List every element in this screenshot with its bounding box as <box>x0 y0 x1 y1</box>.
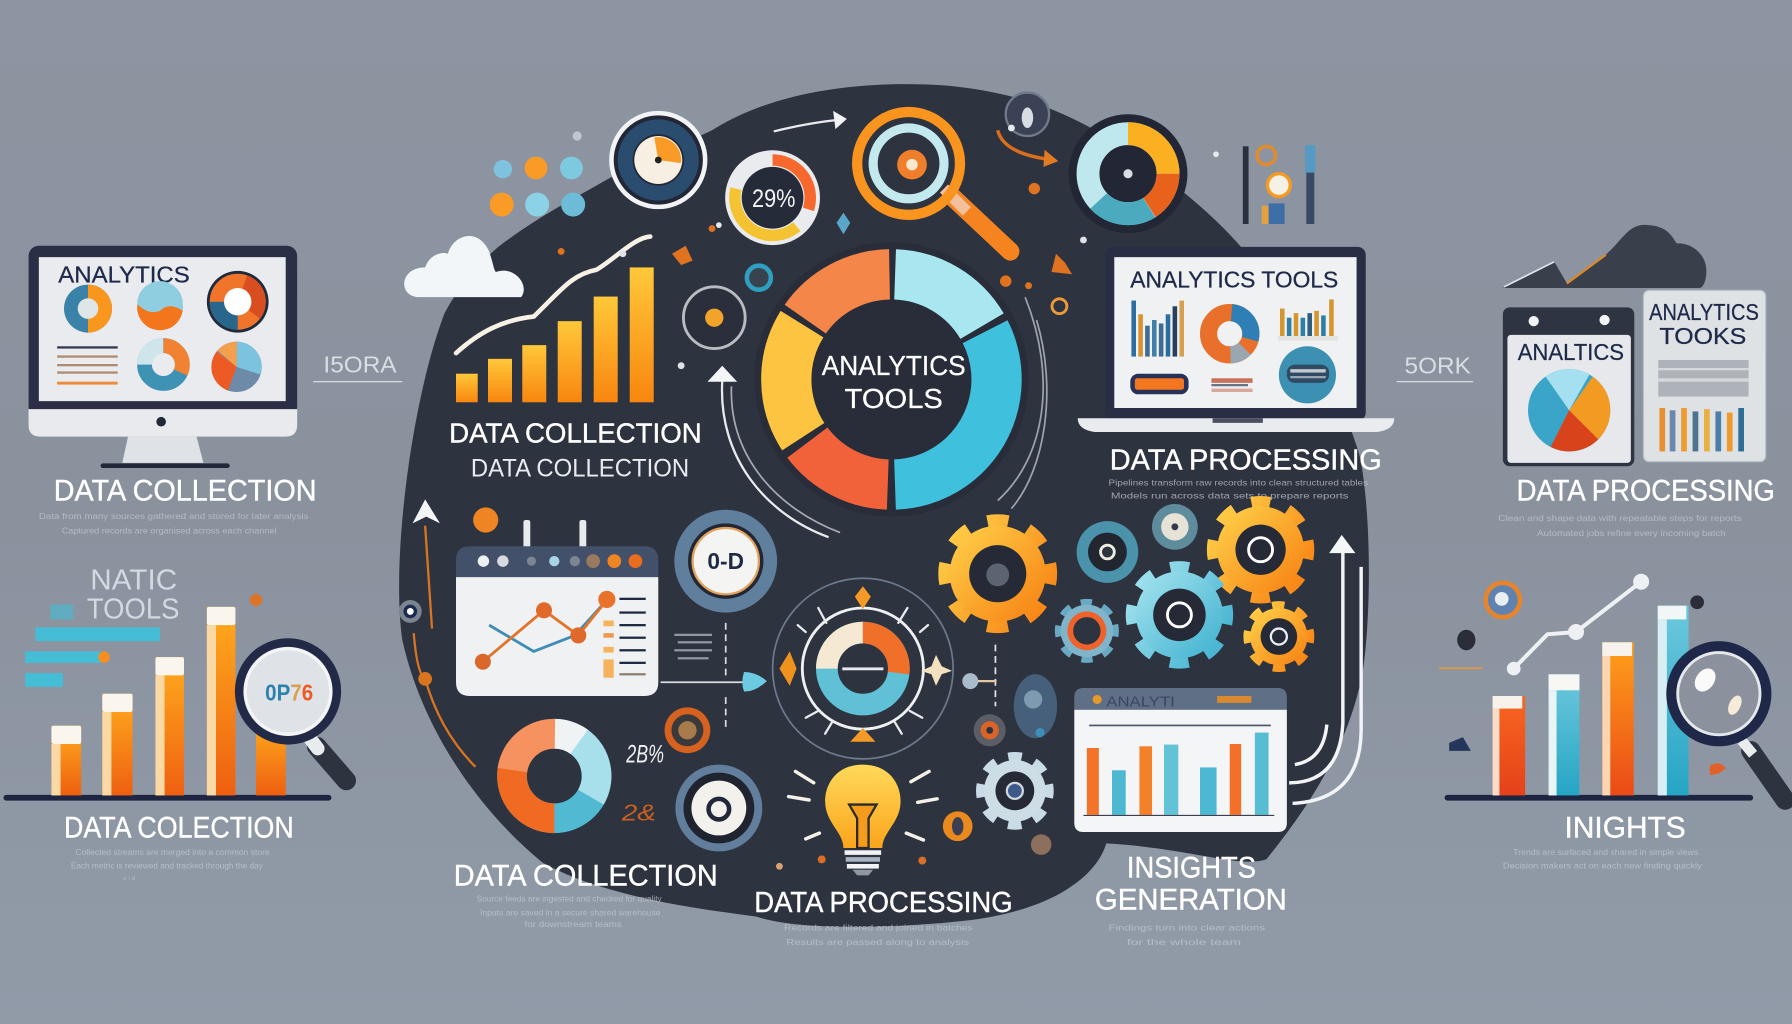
caption: data collection lower left: Collected streams are merged into a common store <box>75 847 270 857</box>
scattered glyph marks <box>558 125 1219 369</box>
tag: I5ORA: I5ORA <box>323 352 397 378</box>
icon: small orange ring badge <box>665 707 710 753</box>
icon: tools cluster <box>1243 145 1315 224</box>
tag: I5ORA <box>313 352 402 382</box>
icon: small dial with orange arrow <box>998 93 1058 167</box>
icon: badge with code <box>674 510 777 613</box>
caption: insights right: Decision makers act on each new finding quickly <box>1503 861 1702 871</box>
card bars <box>1659 408 1744 451</box>
label: insights generation: GENERATION <box>1095 884 1287 917</box>
caption: data processing centre: Pipelines transform raw records into clean structured tables <box>1109 478 1368 488</box>
label: data processing centre: DATA PROCESSING <box>1110 445 1382 477</box>
caption: insights right: Trends are surfaced and shared in simple views <box>1513 847 1698 857</box>
caption: data collection bottom: Source feeds are ingested and checked for quality <box>477 894 662 904</box>
panel: monitor analytics <box>29 246 297 468</box>
arrow: top <box>774 111 847 131</box>
line series <box>475 591 615 670</box>
chart: lower donut <box>497 718 612 834</box>
arrow: arcs right of donut <box>998 297 1047 509</box>
caption: insights generation <box>1109 922 1265 947</box>
icon: small beige dial <box>1152 504 1198 550</box>
chart: rising bars <box>456 237 654 402</box>
panel header text: ANALYTI <box>1106 694 1175 710</box>
laptop circle <box>1279 346 1336 403</box>
horizontal cyan bars <box>25 605 160 687</box>
caption: data collection bottom: for downstream teams <box>525 919 622 929</box>
icon: dark orange oval <box>1457 630 1475 650</box>
caption: data collection left: Captured records are organised across each channel <box>62 526 277 536</box>
label: data collection left: DATA COLLECTION <box>54 475 317 508</box>
chart: process dial <box>773 578 953 759</box>
label: data collection centre two: DATA COLLECTION <box>471 455 689 483</box>
card title: ANALYTICS <box>1649 299 1759 325</box>
caption: data processing bottom <box>784 922 973 947</box>
icon: teal ring <box>1077 521 1138 583</box>
icon: orange magnifier <box>857 112 1010 251</box>
icon: colour dots <box>490 157 585 217</box>
caption: data processing right <box>1498 513 1742 538</box>
label: data collection lower left: DATA COLECTION <box>64 812 294 845</box>
icon: small swirl dial <box>683 287 745 349</box>
caption: data collection bottom: Inputs are saved in a secure shared warehouse <box>480 907 661 917</box>
heading: natic tools: NATIC <box>90 565 177 597</box>
caption: data processing bottom: Results are passed along to analysis <box>786 937 969 947</box>
label: insights right: INIGHTS <box>1565 812 1686 845</box>
label: insights generation: INSIGHTS <box>1127 852 1256 885</box>
laptop donut <box>1200 304 1260 364</box>
caption: data collection bottom <box>477 894 662 929</box>
donut title: TOOLS <box>845 383 943 414</box>
icon: small orange ring <box>1052 299 1067 314</box>
header dots <box>478 554 642 568</box>
laptop bar group one <box>1131 301 1184 357</box>
laptop pill <box>1130 374 1189 394</box>
laptop heading: ANALYTICS TOOLS <box>1130 266 1338 292</box>
icon: blue gear with orange ring <box>1055 599 1119 663</box>
panel: analytics calendar card <box>1503 307 1634 466</box>
icon: small spots <box>776 834 1051 870</box>
icon: blue shield blob <box>1014 674 1057 738</box>
card title <box>1649 299 1759 349</box>
caption: data processing bottom: Records are filtered and joined in batches <box>784 922 973 932</box>
icon: cyan gear <box>1126 561 1233 668</box>
caption: data collection lower left: old <box>123 876 135 882</box>
label: insights generation <box>1095 852 1287 917</box>
arrow: calendar to dial <box>661 623 767 730</box>
caption: data collection left <box>39 511 309 536</box>
icon: dark cloud and peak <box>1503 225 1706 288</box>
heading: natic tools: TOOLS <box>87 593 179 625</box>
panel: calendar line chart <box>456 520 658 696</box>
icon: magnifier left: 0P76 <box>265 680 313 706</box>
arrow: up to central donut <box>707 366 840 537</box>
laptop bar group two <box>1278 299 1338 341</box>
donut title: ANALYTICS <box>822 350 966 381</box>
trend line <box>456 237 650 353</box>
bulb rays <box>789 771 937 840</box>
heading: natic tools <box>87 565 179 625</box>
label: data collection centre one: DATA COLLECTION <box>449 417 702 448</box>
arrows: insight loop <box>1289 535 1361 803</box>
icon: badge with code: 0-D <box>707 548 744 574</box>
small list marks <box>674 634 712 659</box>
caption: data processing centre <box>1109 478 1368 500</box>
trend line <box>1507 574 1649 675</box>
icon: small target <box>974 714 1006 746</box>
arrow: left edge up <box>399 499 475 767</box>
caption: data processing centre: Models run across data sets to prepare reports <box>1111 490 1349 500</box>
caption: data collection lower left <box>71 847 270 882</box>
icon: orange blob <box>473 507 498 533</box>
panel: laptop analytics tools <box>1078 247 1394 432</box>
icon: light bulb <box>789 765 937 875</box>
donut four <box>145 346 182 383</box>
icon: target dial <box>609 111 707 209</box>
panel bars <box>1087 733 1269 815</box>
card title: TOOKS <box>1659 323 1746 349</box>
icon: cyan ring <box>747 266 771 290</box>
caption: data collection lower left: Each metric is reviewed and tracked through the day <box>71 861 264 871</box>
chart: bottom left bars <box>3 565 346 801</box>
label: 2B percent: 2B% <box>626 740 664 768</box>
tag: 5ORK: 5ORK <box>1405 353 1471 379</box>
card heading: ANALTICS <box>1518 339 1624 365</box>
icon: orange gear large <box>1207 496 1314 603</box>
caption: data processing right: Automated jobs refine every incoming batch <box>1537 528 1726 538</box>
label: data processing right: DATA PROCESSING <box>1517 475 1775 508</box>
card stripes <box>1658 360 1749 397</box>
icon: silver gear <box>976 752 1054 830</box>
donut title <box>822 350 966 414</box>
donut one <box>64 285 112 333</box>
monitor heading: ANALYTICS <box>58 261 190 287</box>
icon: lens badge <box>675 765 762 851</box>
donut three <box>207 271 269 333</box>
label: data collection bottom: DATA COLLECTION <box>454 860 718 893</box>
pie chart <box>211 342 262 392</box>
icon: small orange gear <box>1244 602 1314 671</box>
panel: analytics tools card <box>1643 290 1766 462</box>
caption: data collection left: Data from many sources gathered and stored for later analysis <box>39 511 309 521</box>
icon: yellow gear <box>937 513 1058 634</box>
chart: central analytics donut <box>745 233 1038 526</box>
icon: orange coin <box>943 811 973 841</box>
central dark blob <box>399 84 1369 927</box>
list lines <box>57 346 118 385</box>
icon: orange pin <box>1483 581 1522 619</box>
caption: insights generation: for the whole team <box>1127 937 1241 947</box>
panel: insights bar chart <box>1074 688 1287 832</box>
chart: segmented donut top right <box>1069 114 1187 233</box>
gauge: percent <box>719 145 826 251</box>
icon: cloud <box>404 236 524 297</box>
caption: data processing right: Clean and shape data with repeatable steps for reports <box>1498 513 1742 523</box>
donut two <box>137 281 183 330</box>
icon: magnifier right <box>1672 647 1785 800</box>
dial markers <box>779 586 952 742</box>
gauge: percent: 29% <box>752 185 795 213</box>
caption: insights right <box>1503 847 1702 871</box>
laptop mini table <box>1211 378 1253 392</box>
card pie <box>1528 369 1610 451</box>
label: orange note: 2& <box>620 800 656 826</box>
connector: dashed with drop <box>962 645 997 706</box>
dial spokes <box>798 608 928 734</box>
caption: insights generation: Findings turn into clear actions <box>1109 922 1265 932</box>
label: data processing bottom: DATA PROCESSING <box>754 887 1013 919</box>
legend list <box>603 598 646 678</box>
icon: magnifier left <box>235 638 346 781</box>
chart: insights bars right <box>1439 574 1785 801</box>
